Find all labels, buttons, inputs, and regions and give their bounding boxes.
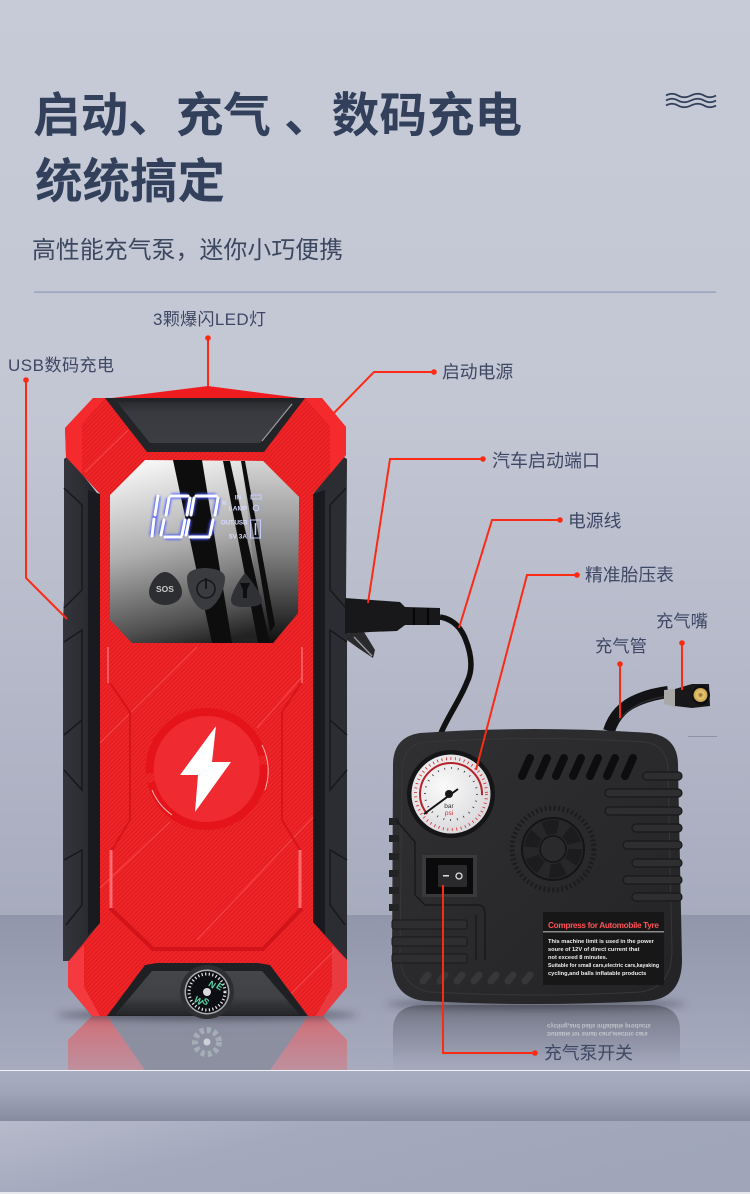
- callout: gauge: 精准胎压表: [585, 565, 674, 585]
- shadow under products: [57, 999, 686, 1020]
- warning label: not exceed 8 minutes.: [548, 955, 608, 961]
- callout: starter power: [333, 362, 513, 414]
- buttons: SOS: [156, 584, 174, 594]
- title: [33, 90, 522, 209]
- callout: pump switch: 充气泵开关: [544, 1043, 633, 1063]
- device reflection: [68, 1016, 347, 1070]
- callout: nozzle: [656, 611, 708, 690]
- display 100: LAMP: [229, 506, 248, 512]
- callout: starter power: 启动电源: [442, 362, 513, 382]
- callout: LED lights: 3颗爆闪LED灯: [153, 310, 266, 329]
- callout: car start port: [368, 451, 600, 603]
- title: 启动、充气 、数码充电: [33, 90, 522, 143]
- pump ribs right: [605, 772, 682, 901]
- compass: W: [192, 994, 205, 1008]
- pressure gauge: [407, 750, 495, 838]
- buttons: [149, 568, 262, 610]
- display 100: OUT.USB: [221, 520, 248, 526]
- icon: lightning bolt: [180, 726, 231, 812]
- pump vents: [522, 758, 633, 776]
- side grip right: [313, 456, 347, 961]
- tire wheel: [512, 808, 594, 890]
- faint line: [688, 736, 717, 737]
- pump left grooves: [396, 820, 485, 960]
- display 100: %: [221, 501, 227, 507]
- pump reflection: Suitable for small cars,electric cars: [547, 1030, 648, 1036]
- diagonal creases: [85, 430, 335, 1000]
- display 100: [152, 494, 261, 540]
- callout: power cable: [459, 511, 622, 628]
- pump left notches: [389, 818, 399, 911]
- warning label: soure of 12V of direct current that: [548, 947, 639, 953]
- callout: USB charging: [8, 356, 114, 619]
- callout: LED lights: [153, 310, 266, 386]
- subtitle: 高性能充气泵，迷你小巧便携: [32, 237, 343, 264]
- compass: S: [201, 996, 211, 1007]
- power cable: [440, 617, 471, 733]
- lightning ring: [150, 712, 268, 826]
- pressure gauge: psi: [445, 810, 453, 817]
- top cap: [105, 398, 305, 452]
- power bank: [63, 386, 347, 1019]
- callout: car start port: 汽车启动端口: [492, 451, 600, 471]
- warning label: cycling,and balls inflatable products: [548, 971, 646, 977]
- icon: waves: [666, 94, 716, 107]
- warning label: Suitable for small cars,electric cars,kayaking: [548, 963, 659, 969]
- pressure gauge: bar: [444, 803, 455, 810]
- bottom cap: [107, 963, 308, 1016]
- air pump: [389, 729, 682, 1004]
- callout: gauge: [476, 565, 674, 770]
- car clamp connector: [345, 598, 440, 658]
- callout: pump switch: [443, 885, 633, 1063]
- display 100: 5V 3A: [229, 534, 247, 540]
- callout: power cable: 电源线: [568, 511, 622, 531]
- callout: nozzle: 充气嘴: [656, 611, 708, 631]
- rocker switch: [422, 855, 477, 897]
- top red roof: [112, 386, 300, 398]
- pump reflection: cycling,and balls inflatable products: [547, 1022, 651, 1028]
- compass: N: [207, 979, 218, 991]
- callout: hose: [595, 636, 647, 718]
- divider: [34, 292, 716, 293]
- raised panel outline: [110, 683, 301, 850]
- air hose: [609, 684, 710, 731]
- warning label: Compress for Automobile Tyre: [548, 920, 659, 930]
- compass: E: [214, 981, 225, 992]
- warning label: [543, 912, 664, 985]
- side grip left: [63, 456, 100, 961]
- warning label: This machine limit is used in the power: [548, 939, 655, 945]
- pump reflection: [393, 1005, 680, 1070]
- callout: hose: 充气管: [595, 636, 647, 656]
- compass: [180, 965, 234, 1019]
- display 100: IN: [235, 494, 242, 502]
- screen: [110, 460, 299, 643]
- red body: [65, 398, 347, 1016]
- callout: USB charging: USB数码充电: [8, 356, 114, 375]
- title: 统统搞定: [35, 156, 225, 209]
